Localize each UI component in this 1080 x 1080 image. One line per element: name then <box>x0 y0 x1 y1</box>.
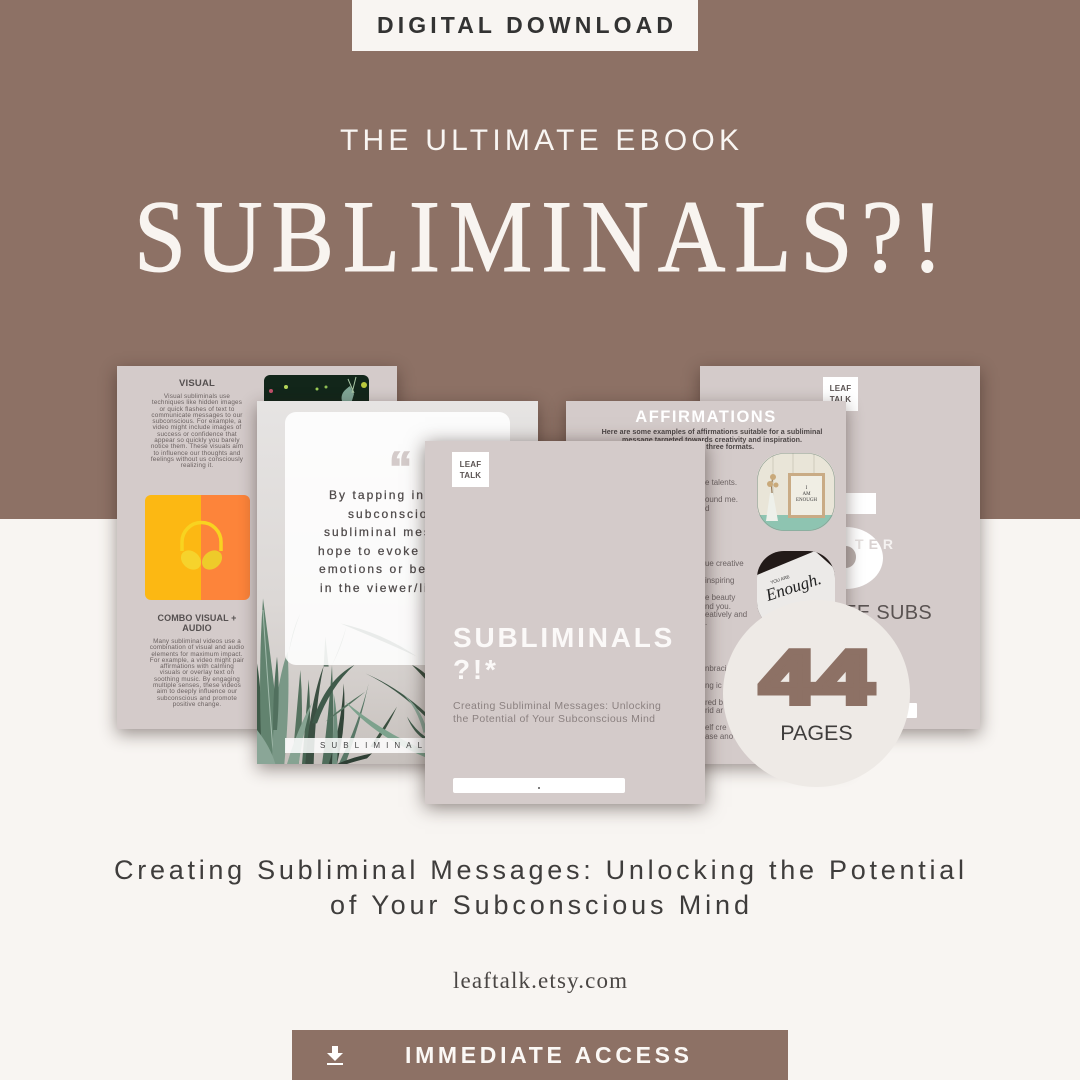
large number five <box>846 493 883 589</box>
subtitle: the ultimate ebook: THE ULTIMATE EBOOK <box>340 124 739 157</box>
image: framed i am enough print: I <box>806 486 808 491</box>
body: combo <box>150 638 244 708</box>
page preview: five free subs <box>700 366 980 729</box>
description line one: Creating Subliminal Messages: Unlocking the Potential <box>114 855 964 885</box>
logo tile <box>823 377 858 411</box>
logo tile <box>452 452 489 487</box>
body: combo: For example, a video might pair <box>150 657 244 664</box>
body: visual: realizing it. <box>181 462 213 469</box>
body: combo: combination of visual and audio <box>150 644 244 651</box>
image: you are enough card: Enough. <box>762 569 824 605</box>
free subs label: FREE SUBS <box>816 602 932 624</box>
quote text: hope to evoke specific <box>318 544 482 558</box>
brown top background <box>0 0 1080 519</box>
quote text: subconscious <box>348 507 445 521</box>
quote text: By tapping into <box>329 488 439 502</box>
image: you are enough card <box>757 551 835 618</box>
heading: combo visual and audio <box>158 613 236 632</box>
affirmation list fragments: nd you. <box>705 602 731 611</box>
body: visual: appear so quickly you barely <box>154 437 240 444</box>
image: dark splash <box>264 375 369 401</box>
body: visual: video might include images of <box>153 424 241 431</box>
pages label: PAGES <box>780 721 853 745</box>
affirmation list fragments: nbraci <box>705 664 726 673</box>
immediate access button <box>292 1030 788 1080</box>
logo tile: LEAF <box>460 460 481 469</box>
cover subtitle <box>453 700 661 725</box>
number 44: 44 <box>760 635 873 719</box>
logo tile: LEAF <box>830 384 851 393</box>
body: visual: communicate messages to our <box>151 412 243 419</box>
quote text: emotions or beliefs <box>319 562 459 576</box>
quote mark: “ <box>389 442 412 494</box>
quote text <box>318 488 482 595</box>
affirmation list fragments: e beauty <box>705 593 735 602</box>
affirmation list fragments: ase ano <box>705 732 733 741</box>
body: visual <box>151 393 243 469</box>
affirmation list fragments: elf cre <box>705 723 726 732</box>
body: combo: subconscious and promote <box>157 695 237 702</box>
heading: combo visual and audio: AUDIO <box>182 622 212 632</box>
body: visual: techniques like hidden images <box>152 399 242 406</box>
intro text <box>602 428 822 451</box>
cover bar dot <box>538 787 540 789</box>
intro text: three formats. <box>706 443 754 451</box>
image: framed i am enough print <box>757 453 835 531</box>
body: combo: affirmations with calming <box>160 663 234 670</box>
quote text: subliminal messages <box>324 525 474 539</box>
quote text: in the viewer/listener <box>320 581 474 595</box>
front cover <box>425 441 705 804</box>
cover subtitle: Creating Subliminal Messages: Unlocking <box>453 700 661 712</box>
digital download tab: DIGITAL DOWNLOAD <box>377 12 673 38</box>
footer label text: SUBLIMINALS <box>320 741 439 750</box>
heading: visual: VISUAL <box>179 378 215 389</box>
title: subliminals: SUBLIMINALS?! <box>134 180 943 294</box>
image: you are enough card: YOU ARE <box>770 574 790 585</box>
body: combo: Many subliminal videos use a <box>153 638 241 645</box>
footer label bar <box>285 738 510 753</box>
affirmation list fragments: ng ic <box>705 681 722 690</box>
affirmation list fragments: eatively and <box>705 610 747 619</box>
immediate access button: IMMEDIATE ACCESS <box>405 1042 689 1068</box>
body: combo: positive change. <box>173 701 221 708</box>
heading: combo visual and audio: COMBO VISUAL + <box>158 613 236 623</box>
body: visual: notice them. These visuals aim <box>151 443 243 450</box>
page preview: visual and combo <box>117 366 397 729</box>
page preview: affirmations <box>566 401 846 764</box>
cover title <box>453 622 675 685</box>
affirmation list fragments: red b <box>705 698 723 707</box>
cover bottom bar <box>453 778 625 793</box>
shop url: leaftalk.etsy.com <box>453 968 627 993</box>
cover title: ?!* <box>453 654 499 685</box>
description line two: of Your Subconscious Mind <box>330 890 749 920</box>
affirmation list fragments: . <box>705 618 707 627</box>
affirmation list fragments <box>705 478 747 741</box>
affirmation list fragments: d <box>705 504 709 513</box>
plant image <box>257 598 425 764</box>
chapter label: TER <box>855 536 898 552</box>
body: visual: subconscious. For example, a <box>152 418 242 425</box>
body: visual: feelings without us consciously <box>151 456 243 463</box>
image: framed i am enough print: AM <box>802 492 811 497</box>
intro text: message targeted towards creativity and inspiration. <box>622 436 802 444</box>
cover title: SUBLIMINALS <box>453 622 675 653</box>
body: visual: Visual subliminals use <box>164 393 230 400</box>
body: visual: success or confidence that <box>157 431 237 438</box>
affirmation list fragments: e talents. <box>705 478 737 487</box>
logo tile: TALK <box>830 394 851 404</box>
body: combo: visuals or overlay text on <box>160 669 234 676</box>
affirmation list fragments: ue creative <box>705 559 744 568</box>
affirmation list fragments: rid ar <box>705 706 723 715</box>
affirmation list fragments: ound me. <box>705 495 738 504</box>
image: yellow headphones <box>145 495 250 600</box>
body: combo: soothing music. By engaging <box>154 676 240 683</box>
body: combo: multiple senses, these videos <box>153 682 241 689</box>
cover subtitle: the Potential of Your Subconscious Mind <box>453 713 655 725</box>
body: combo: elements for maximum impact. <box>151 651 243 658</box>
body: visual: or quick flashes of text to <box>159 406 235 413</box>
body: combo: aim to deeply influence our <box>157 688 237 695</box>
heading: affirmations: AFFIRMATIONS <box>635 408 777 426</box>
white quote panel <box>285 412 510 665</box>
digital download tab <box>352 0 698 51</box>
image: framed i am enough print: ENOUGH <box>796 498 817 503</box>
page preview: quote with aloe plant <box>257 401 538 764</box>
body: visual: to influence our thoughts and <box>153 450 241 457</box>
logo tile: TALK <box>460 470 481 480</box>
page count badge <box>723 600 910 787</box>
intro text: Here are some examples of affirmations suitable for a subliminal <box>602 428 822 436</box>
bottom white bar <box>840 703 917 718</box>
affirmation list fragments: inspiring <box>705 576 734 585</box>
